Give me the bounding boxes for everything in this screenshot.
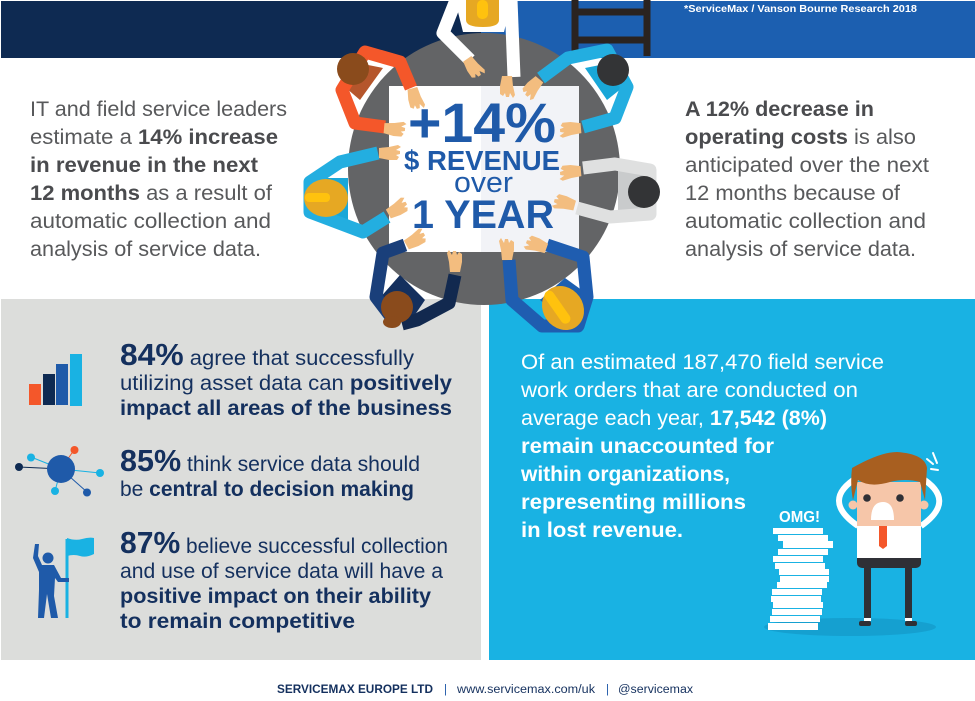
text block: unaccounted work orders: average each year, 17,542 (8%) [521,406,827,430]
text block: unaccounted work orders: remain unaccounted for [521,434,775,458]
text block: unaccounted work orders: representing millions [521,490,746,514]
text block: 84% agree: 84% agree that successfully [120,337,414,372]
text block: 87% believe [120,525,448,633]
text block: 87% believe: to remain competitive [120,609,355,633]
text block: 85% think [120,443,420,501]
text block: revenue increase: IT and field service leaders [30,97,287,121]
text block: 85% think: be central to decision making [120,477,414,501]
text block: revenue increase: in revenue in the next [30,153,258,177]
text block: revenue increase [30,97,287,261]
text block: unaccounted work orders: Of an estimated 187,470 field service [521,350,884,374]
source note: *ServiceMax / Vanson Bourne Research 2018 [684,4,917,15]
icon: bar chart [29,354,82,406]
illustration: round table with people [304,0,660,338]
illustration: shadow under paper stack and man [764,618,936,636]
card: +14% revenue over 1 year: +14% [408,91,556,154]
text block: operating costs decrease: 12 months because of [685,181,900,205]
text block: 84% agree: impact all areas of the business [120,396,452,420]
text block: unaccounted work orders: in lost revenue. [521,518,683,542]
icon: person with flag [33,538,94,618]
text block: 85% think: 85% think service data should [120,443,420,478]
card: +14% revenue over 1 year: over [454,167,513,199]
card: +14% revenue over 1 year: 1 YEAR [412,193,554,237]
footer: SERVICEMAX EUROPE LTD [277,684,433,696]
person: bottom left, navy jacket [376,227,462,328]
text block: revenue increase: automatic collection and [30,209,271,233]
text block: 84% agree: utilizing asset data can positively [120,371,452,395]
text block: operating costs decrease: anticipated over the next [685,153,929,177]
table [348,33,620,305]
card: +14% revenue over 1 year [389,86,579,252]
text block: revenue increase: analysis of service data. [30,237,261,261]
panel: grey statistics background [1,299,481,660]
footer: | [606,684,609,696]
label: OMG!: OMG! [779,509,820,526]
person: top, white shirt and hard hat [443,0,515,98]
text block: revenue increase: estimate a 14% increase [30,125,278,149]
person: bottom right, blue jacket and hard hat [499,234,593,338]
icon: data network [15,446,104,496]
text block: 87% believe: 87% believe successful collection [120,525,448,560]
header band: blue with ladder [481,0,975,58]
text block: operating costs decrease [685,97,929,261]
text block: unaccounted work orders [520,350,884,542]
footer: | [444,684,447,696]
text block: unaccounted work orders: work orders that are conducted on [520,378,858,402]
footer: @servicemax [618,684,693,696]
text block: 84% agree [120,337,452,420]
text block: 87% believe: positive impact on their ability [120,584,431,608]
person: top right, blue shirt [520,50,629,138]
text block: unaccounted work orders: within organizations, [520,462,730,486]
text block: 87% believe: and use of service data will have a [120,559,443,583]
illustration: worried man [839,452,939,626]
text block: revenue increase: 12 months as a result of [30,181,272,205]
footer [277,684,693,696]
text block: operating costs decrease: operating costs is also [685,125,916,149]
illustration: stack of paper [768,528,833,630]
text block: operating costs decrease: automatic collection and [685,209,926,233]
text block: operating costs decrease: A 12% decrease in [685,97,874,121]
footer: www.servicemax.com/uk [456,684,595,696]
header band: navy [1,1,481,58]
person: right, grey shirt [551,164,660,217]
person: top left, orange shirt [337,52,426,137]
text block: operating costs decrease: analysis of service data. [685,237,916,261]
card: +14% revenue over 1 year: $ REVENUE [404,145,560,176]
panel: blue work orders background [489,299,975,660]
person: left, blue shirt and hard hat [304,145,411,232]
